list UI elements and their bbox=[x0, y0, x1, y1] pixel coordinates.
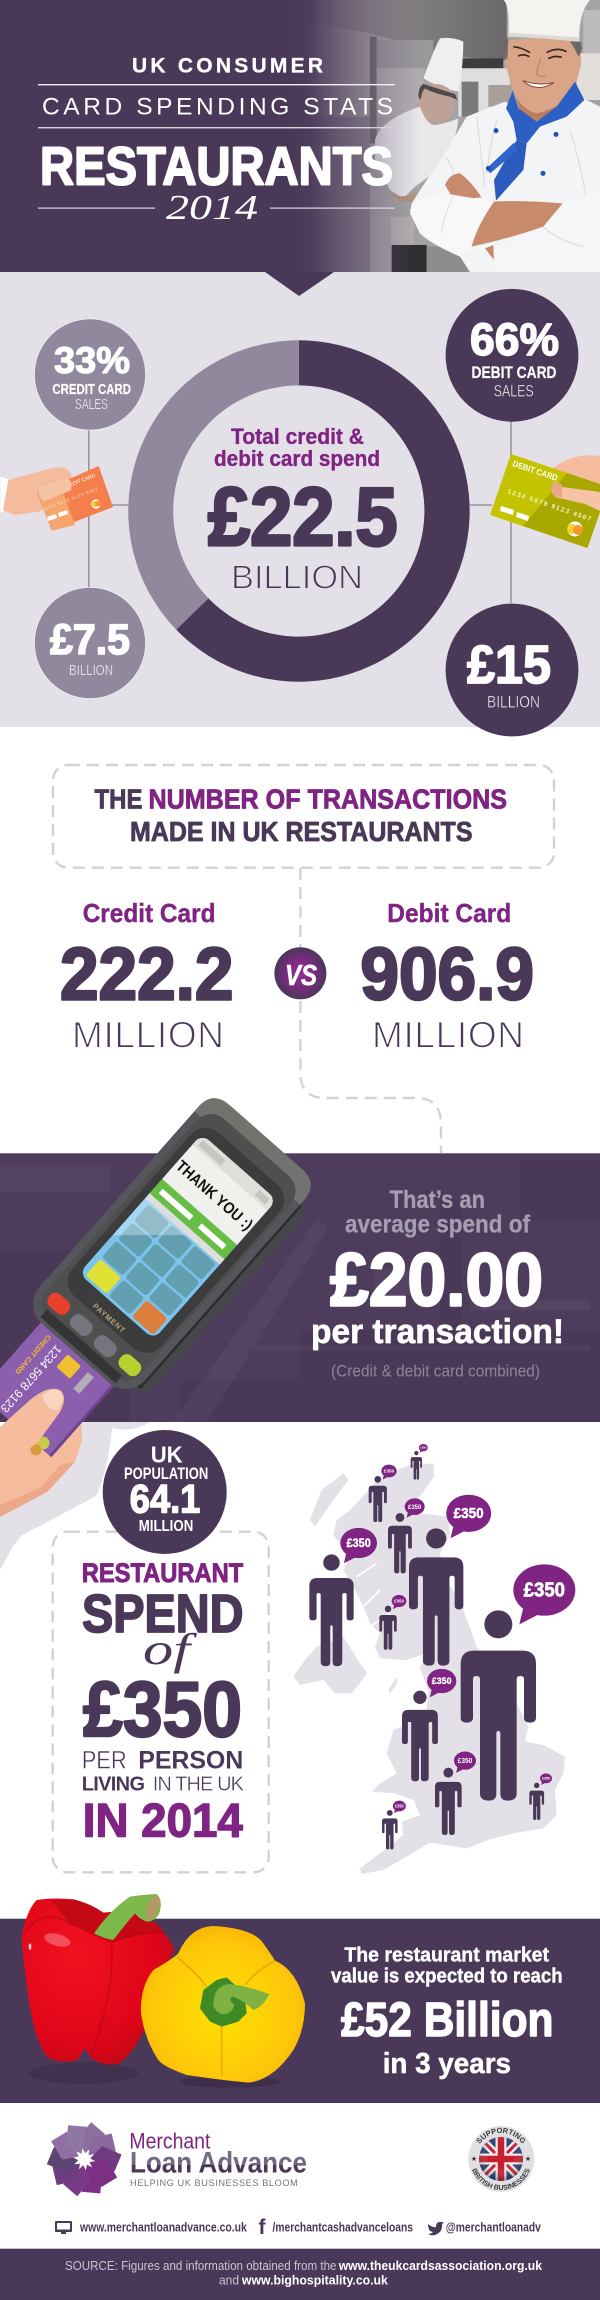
source band: SOURCE: Figures and information obtained from the bbox=[65, 2259, 337, 2273]
source band: and bbox=[219, 2273, 239, 2287]
restaurant spend of £350 text bbox=[82, 1558, 245, 1848]
neck bbox=[517, 100, 558, 122]
average spend text: (Credit & debit card combined) bbox=[331, 1363, 540, 1381]
supporting British businesses badge: ★ bbox=[525, 2155, 531, 2163]
donut label bbox=[208, 424, 398, 595]
supporting British businesses badge: BRITISH BUSINESSES bbox=[472, 2168, 530, 2190]
panel: total card spend bbox=[0, 272, 600, 736]
panel: UK population and spend per person bbox=[0, 1422, 269, 1872]
supporting British businesses badge bbox=[468, 2126, 534, 2192]
restaurant photo texture bbox=[0, 1160, 600, 1422]
terminal screen bbox=[79, 1134, 277, 1340]
kitchen background photo bbox=[290, 0, 600, 272]
dashed title box bbox=[53, 765, 554, 868]
facebook contact: f bbox=[258, 2216, 266, 2239]
stat: £15 billion bbox=[446, 604, 578, 736]
market value text bbox=[331, 1945, 563, 2080]
restaurant spend of £350 text: PER bbox=[82, 1746, 127, 1774]
thumb bbox=[0, 1389, 64, 1470]
restaurant spend of £350 text: LIVING bbox=[82, 1774, 145, 1796]
hand shadow bbox=[0, 1422, 150, 1570]
card logo bbox=[30, 1436, 50, 1456]
red pepper bbox=[22, 1893, 174, 2065]
screen message: THANK YOU :) bbox=[172, 1158, 255, 1234]
stat: £7.5 billion: BILLION bbox=[69, 663, 113, 679]
donut label: £22.5 bbox=[208, 470, 398, 563]
panel: market value band bbox=[0, 1893, 600, 2103]
blue neck scarf bbox=[506, 82, 584, 143]
stat: 66% debit card sales: DEBIT CARD bbox=[472, 363, 556, 382]
speech bubbles: £350 bbox=[384, 1469, 394, 1475]
stat: 33% credit card sales: CREDIT CARD bbox=[52, 382, 131, 398]
purple credit card bbox=[0, 1318, 117, 1457]
panel: average spend band bbox=[0, 1153, 600, 1422]
stat: 66% debit card sales bbox=[446, 289, 578, 422]
hand shading bbox=[0, 1462, 75, 1517]
header pointer bbox=[265, 272, 334, 296]
stat: 33% credit card sales bbox=[34, 319, 146, 430]
source band: www.bighospitality.co.uk bbox=[241, 2273, 388, 2287]
UK population circle: POPULATION bbox=[124, 1465, 208, 1483]
speech bubbles: £350 bbox=[408, 1504, 422, 1511]
jacket buttons bbox=[486, 128, 558, 176]
speech bubbles: £350 bbox=[454, 1506, 484, 1522]
speech bubbles: £350 bbox=[542, 1776, 550, 1781]
stat: 66% debit card sales: SALES bbox=[494, 382, 534, 401]
icon: hand holding credit card: 1234 5678 9123 4567 bbox=[43, 486, 99, 512]
restaurant spend of £350 text: PERSON bbox=[138, 1746, 243, 1774]
UK population circle: 64.1 bbox=[130, 1478, 200, 1522]
speech bubbles: £350 bbox=[346, 1536, 371, 1550]
source band: www.theukcardsassociation.org.uk bbox=[338, 2259, 542, 2273]
restaurant spend of £350 text: of bbox=[143, 1625, 198, 1674]
chef jacket bbox=[410, 98, 600, 272]
speech bubbles: £350 bbox=[524, 1580, 565, 1602]
twitter contact bbox=[428, 2220, 541, 2235]
facebook contact bbox=[258, 2216, 413, 2239]
debit card transactions: MILLION bbox=[372, 1015, 524, 1056]
terminal assembly bbox=[0, 1098, 311, 1458]
average spend text: per transaction! bbox=[311, 1313, 564, 1351]
stat: 33% credit card sales: 33% bbox=[54, 340, 130, 381]
heading: card spending stats: CARD SPENDING STATS bbox=[42, 94, 393, 121]
debit card transactions: 906.9 bbox=[360, 932, 534, 1015]
terminal body bbox=[22, 1090, 319, 1400]
pepper stem bbox=[94, 1894, 161, 1940]
peppers bbox=[22, 1893, 305, 2088]
heading: restaurants: RESTAURANTS bbox=[40, 136, 393, 196]
average spend text: That’s an bbox=[390, 1186, 485, 1214]
panel: number of transactions bbox=[53, 765, 554, 1153]
speech bubbles: £350 bbox=[394, 1599, 404, 1605]
logo wordmark: HELPING UK BUSINESSES BLOOM bbox=[130, 2178, 298, 2188]
section title: MADE IN UK RESTAURANTS bbox=[130, 816, 472, 847]
speech bubbles: £350 bbox=[458, 1757, 472, 1765]
icon: hand holding debit card: DEBIT CARD bbox=[511, 458, 559, 483]
main chef bbox=[410, 0, 600, 272]
credit card transactions: 222.2 bbox=[60, 932, 234, 1015]
year: 2014 bbox=[166, 188, 258, 227]
market value text: £52 Billion bbox=[341, 1994, 554, 2047]
panel: header bbox=[0, 0, 600, 272]
supporting British businesses badge: SUPPORTING bbox=[476, 2128, 526, 2144]
dashed connector bbox=[300, 868, 441, 1153]
market value text: The restaurant market bbox=[344, 1945, 549, 1967]
terminal rear shell bbox=[38, 1118, 309, 1398]
section title bbox=[94, 783, 507, 847]
purple credit card: CREDIT CARD bbox=[13, 1333, 52, 1375]
logo wordmark: Merchant bbox=[129, 2129, 210, 2154]
payment terminal and card bbox=[0, 1090, 327, 1517]
UK population circle: MILLION bbox=[139, 1518, 193, 1535]
keypad glass reflection bbox=[113, 1198, 186, 1235]
stat: £7.5 billion bbox=[34, 587, 146, 699]
stat: £7.5 billion: £7.5 bbox=[50, 616, 130, 664]
credit card transactions bbox=[60, 898, 234, 1056]
UK population circle: UK bbox=[151, 1442, 183, 1468]
debit card transactions bbox=[360, 898, 534, 1056]
face bbox=[505, 38, 581, 113]
heading: UK consumer: UK CONSUMER bbox=[132, 55, 323, 78]
chef hat bbox=[503, 0, 590, 42]
stat: £15 billion: BILLION bbox=[487, 693, 540, 712]
market value text: in 3 years bbox=[383, 2048, 511, 2080]
stat: 66% debit card sales: 66% bbox=[470, 314, 559, 365]
credit card transactions: Credit Card bbox=[83, 898, 216, 928]
average spend text: average spend of bbox=[345, 1211, 531, 1239]
stat: 33% credit card sales: SALES bbox=[75, 397, 108, 413]
donut label: BILLION bbox=[231, 558, 363, 595]
supporting British businesses badge: ★ bbox=[471, 2155, 477, 2163]
logo wordmark: Loan Advance bbox=[130, 2147, 307, 2180]
panel: footer bbox=[0, 2122, 600, 2300]
speech bubbles: £350 bbox=[432, 1676, 451, 1687]
yellow pepper calyx bbox=[200, 1977, 247, 2027]
speech bubbles: £350 bbox=[395, 1803, 404, 1808]
section title: THE bbox=[94, 783, 142, 814]
market value text: value is expected to reach bbox=[331, 1966, 563, 1988]
purple fade overlay bbox=[290, 0, 420, 272]
icon: hand holding debit card: 1234 5678 9123 4567 bbox=[506, 488, 592, 523]
twitter contact: @merchantloanadv bbox=[446, 2220, 541, 2235]
donut chart bbox=[128, 340, 470, 682]
yellow pepper bbox=[141, 1926, 305, 2083]
restaurant spend of £350 text: IN 2014 bbox=[83, 1795, 243, 1848]
hand back bbox=[0, 1418, 82, 1517]
restaurant spend of £350 text: SPEND bbox=[82, 1584, 244, 1644]
restaurant spend of £350 text: £350 bbox=[83, 1665, 242, 1753]
yellow pepper stem bbox=[213, 1984, 269, 2014]
average spend text bbox=[311, 1186, 564, 1381]
speech bubbles: £350 bbox=[420, 1446, 427, 1450]
panel: UK map with people bbox=[293, 1444, 575, 1874]
icon: hand holding credit card bbox=[0, 466, 113, 531]
terminal buttons bbox=[44, 1289, 144, 1381]
UK population circle bbox=[103, 1430, 227, 1554]
donut label: Total credit & bbox=[231, 424, 364, 449]
icon: hand holding debit card bbox=[490, 454, 600, 548]
website contact: www.merchantloanadvance.co.uk bbox=[79, 2220, 247, 2235]
source band bbox=[0, 2248, 600, 2300]
logo flower bbox=[43, 2117, 126, 2202]
stat: £15 billion: £15 bbox=[467, 635, 551, 695]
pepper shadows bbox=[28, 2063, 138, 2084]
speech bubbles bbox=[340, 1444, 575, 1813]
map of UK bbox=[293, 1463, 565, 1874]
donut label: debit card spend bbox=[214, 446, 380, 471]
thumbnail bbox=[42, 1389, 63, 1410]
payment label: PAYMENT bbox=[91, 1301, 127, 1335]
keypad bbox=[86, 1204, 216, 1335]
debit card transactions: Debit Card bbox=[387, 898, 511, 928]
restaurant spend of £350 text: IN THE UK bbox=[153, 1774, 245, 1796]
logo wordmark bbox=[129, 2129, 307, 2188]
restaurant spend of £350 text: RESTAURANT bbox=[82, 1558, 243, 1588]
VS badge bbox=[274, 947, 326, 999]
credit card transactions: MILLION bbox=[72, 1015, 224, 1056]
people figures bbox=[309, 1451, 544, 1849]
background chef bbox=[375, 38, 463, 202]
connector lines bbox=[89, 421, 511, 603]
icon: hand holding credit card: CREDIT CARD bbox=[63, 473, 96, 491]
section title: NUMBER OF TRANSACTIONS bbox=[148, 783, 507, 814]
facebook contact: /merchantcashadvanceloans bbox=[272, 2220, 413, 2235]
VS badge: VS bbox=[285, 960, 318, 992]
average spend text: £20.00 bbox=[330, 1238, 543, 1322]
crossed arms bbox=[445, 173, 482, 198]
dashed spend box bbox=[53, 1532, 269, 1872]
